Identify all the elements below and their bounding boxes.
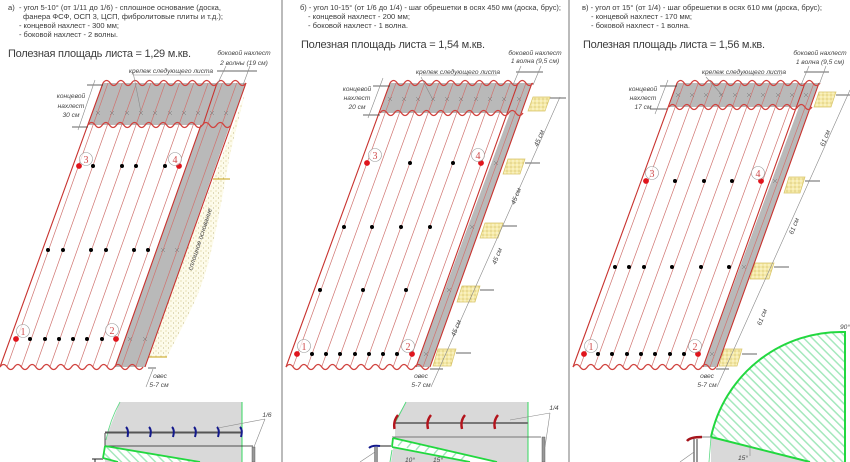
section drawing a: [92, 402, 272, 462]
fasteners a: [13, 163, 182, 342]
text block: variant a conditions: [8, 3, 223, 39]
dimension annotations b: боковой нахлест: [508, 49, 562, 57]
dimension annotations a: концевой: [57, 92, 86, 100]
text block: variant a conditions: - боковой нахлест - 2 волны.: [19, 30, 118, 39]
dimension annotations c: концевой: [629, 85, 658, 93]
text block: variant c conditions: [582, 3, 822, 30]
battens b: [433, 97, 550, 366]
dimension annotations b: овес: [414, 373, 429, 380]
dimension annotations b: [343, 49, 566, 389]
dimension annotations a: 5-7 см: [149, 382, 169, 389]
solid decking under sheet a: [147, 93, 245, 357]
dimension annotations c: 61 см: [819, 129, 832, 148]
dimension annotations a: 2 волны (19 см): [219, 60, 268, 67]
panel divider left: [282, 0, 283, 462]
text block: variant b conditions: [300, 3, 561, 30]
fasteners b: [294, 160, 484, 357]
dimension annotations a: 30 см: [63, 112, 80, 119]
roof sheet c: [573, 80, 820, 370]
section drawing c: roof angle sector: 90°: [840, 323, 850, 331]
panel divider right: [568, 0, 570, 462]
numbered markers b: 2: [406, 342, 410, 353]
text block: variant c conditions: в) - угол от 15° (от 1/4) - шаг обрешетки в осях 610 мм (доска, брус);: [582, 3, 822, 12]
text block: variant c conditions: - боковой нахлест - 1 волна.: [591, 21, 690, 30]
dimension annotations c: [629, 49, 850, 389]
dimension annotations b: 5-7 см: [411, 382, 431, 389]
numbered markers b: [298, 148, 484, 353]
text block: variant a conditions: - концевой нахлест - 300 мм;: [19, 21, 119, 30]
dimension annotations a: нахлест: [58, 103, 85, 110]
numbered markers a: 4: [172, 155, 178, 166]
heading: useful area a: Полезная площадь листа = 1,29 м.кв.: [8, 48, 191, 60]
dimension annotations a: [57, 49, 271, 389]
dimension annotations c: крепеж следующего листа: [702, 68, 786, 76]
dimension annotations c: 5-7 см: [697, 382, 717, 389]
roof sheet b: [286, 80, 533, 370]
dimension annotations b: концевой: [343, 85, 372, 93]
dimension annotations a: боковой нахлест: [217, 49, 271, 57]
panel: variant c: [573, 3, 850, 462]
dimension annotations b: 45 см: [510, 187, 523, 206]
heading: useful area b: Полезная площадь листа = 1,54 м.кв.: [301, 39, 485, 51]
dimension annotations a: крепеж следующего листа: [129, 67, 213, 75]
numbered markers b: 1: [302, 342, 306, 353]
numbered markers b: 4: [476, 151, 480, 162]
dimension annotations c: боковой нахлест: [793, 49, 847, 57]
section drawing c: roof angle sector: 15°: [738, 454, 748, 462]
solid decking under sheet a: сплошное основание: [187, 207, 214, 271]
numbered markers b: 3: [372, 151, 378, 162]
section drawing c: roof angle sector: [680, 323, 850, 462]
dimension annotations c: 17 см: [635, 104, 652, 111]
dimension annotations b: нахлест: [344, 95, 371, 102]
numbered markers c: 2: [692, 342, 698, 353]
heading: useful area c: Полезная площадь листа = 1,56 м.кв.: [583, 39, 765, 51]
numbered markers a: 2: [110, 326, 114, 337]
dimension annotations b: 45 см: [450, 319, 463, 338]
section drawing a: 1/6: [262, 412, 272, 419]
text block: variant b conditions: б) - угол 10-15° (от 1/6 до 1/4) - шаг обрешетки в осях 450 мм (доска, брус);: [300, 3, 561, 12]
numbered markers c: 3: [650, 169, 654, 180]
text block: variant b conditions: - боковой нахлест - 1 волна.: [308, 21, 408, 30]
dimension annotations c: 1 волна (9,5 см): [796, 59, 844, 66]
battens c: [719, 92, 836, 366]
section drawing b: 1/4: [549, 405, 559, 412]
numbered markers a: 3: [84, 155, 88, 166]
text block: variant a conditions: - угол 5-10° (от 1/11 до 1/6) - сплошное основание (доска,: [19, 3, 221, 12]
text block: variant c conditions: - концевой нахлест - 170 мм;: [591, 12, 692, 21]
dimension annotations b: 1 волна (9,5 см): [511, 58, 559, 65]
dimension annotations a: овес: [153, 373, 168, 380]
numbered markers c: 4: [756, 169, 760, 180]
dimension annotations c: 61 см: [788, 217, 801, 236]
text block: variant a conditions: а): [8, 3, 15, 12]
dimension annotations b: крепеж следующего листа: [416, 68, 500, 76]
numbered markers a: 1: [20, 327, 26, 338]
panel: variant a: [0, 3, 272, 462]
roof sheet a: [0, 80, 246, 370]
dimension annotations b: 20 см: [348, 104, 366, 111]
section drawing b: [360, 402, 559, 462]
dimension annotations c: 61 см: [756, 308, 769, 327]
numbered markers c: 1: [588, 342, 594, 353]
dimension annotations b: 45 см: [491, 247, 504, 266]
numbered markers a: [16, 152, 182, 338]
fasteners c: [581, 178, 764, 357]
numbered markers c: [584, 166, 764, 353]
panel: variant b: [286, 3, 566, 462]
text block: variant b conditions: - концевой нахлест - 200 мм;: [308, 12, 410, 21]
dimension annotations b: 45 см: [533, 129, 546, 148]
dimension annotations c: нахлест: [630, 95, 657, 102]
dimension annotations c: овес: [700, 373, 715, 380]
text block: variant a conditions: фанера ФСФ, ОСП 3, ЦСП, фибролитовые плиты и т.д.);: [23, 12, 223, 21]
